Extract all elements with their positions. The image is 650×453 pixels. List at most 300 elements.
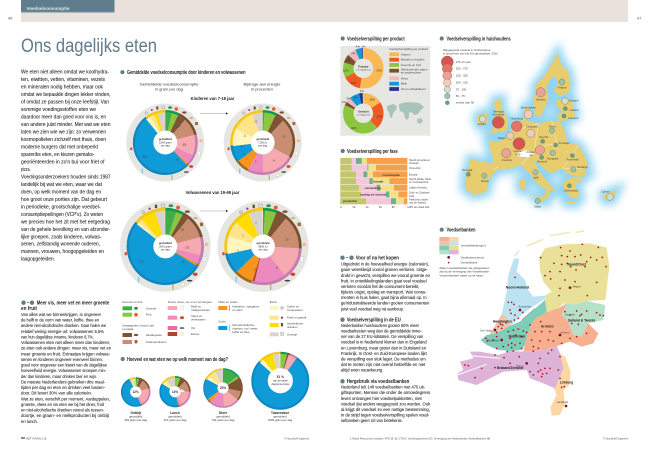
legend: EU map: 150 - 175: [456, 67, 468, 71]
legend: food groups: dranken: [287, 325, 298, 329]
body text: voedselverspilling in de EU: voedselresten weg dan de gemiddelde inwo-: [341, 328, 422, 334]
donut chart: children energy: 13: [254, 122, 258, 124]
legend: product: Vis en schaaldieren: [401, 87, 426, 91]
donut: diner: [204, 369, 242, 407]
body text: meer vis: ze eten ook andere dingen: meer vis, meer vet en: [21, 346, 111, 352]
body text: meer vis: Volwassenen eten niet alleen meer dan kinderen,: [21, 340, 110, 346]
map: Dutch food banks: Ridderkerk: [487, 339, 500, 342]
map: Dutch food banks: Haaglanden: [493, 319, 512, 323]
map: Dutch food banks: Amsterdam: [519, 305, 531, 308]
body text: voedselverspilling in de EU: [341, 323, 427, 374]
donut: gewicht: [342, 89, 383, 130]
legend: food groups: Extra: [270, 300, 277, 304]
donut: lunch: 14%: [172, 390, 178, 394]
stacked bar chart: phases: verwerking: [365, 186, 381, 190]
intro text: omdat we bepaalde dingen lekker vinden,: [21, 92, 110, 98]
legend: EU map: 125 - 150: [456, 74, 468, 78]
legend: food bank regions: zijn bij de Vereniging van Nederlandse: [439, 270, 489, 274]
map: food waste in EU households: Nederland: [511, 117, 523, 121]
stacked bar chart: phases: opslag en vervoer: [360, 192, 387, 196]
legend: EU map: [441, 48, 498, 105]
donut chart: adults grams: [120, 201, 211, 292]
body text: voedselverspilling in de EU: dat te meten zijn niet overal hetzelfde en niet: [341, 362, 426, 368]
body text: hergebruik: in de strijd tegen voedselverspilling spelen voed-: [341, 413, 430, 419]
legend: EU map: 75 - 100: [456, 87, 467, 91]
donut: tussendoor: dagconsumptie: [272, 382, 290, 386]
legend: product: Oliehoudende zaden: [401, 67, 428, 71]
map: food waste in EU households: Estland: [570, 98, 579, 102]
donut: energie: 14%: [350, 81, 357, 85]
body text: voedselverspilling in de EU: de verspilling een stuk lager. De methodes om: [341, 356, 426, 362]
subhead children: Kinderen van 7-18 jaar: [191, 96, 235, 101]
body text: voor of na het kopen: fruit. In ontwikkelingslanden gaat veel voedsel: [341, 278, 427, 284]
title: Ons dagelijks eten: [21, 36, 157, 57]
stacked bar chart: phases: productie: [343, 199, 357, 203]
labels: moments: gemiddeld: [216, 415, 230, 419]
map: Dutch food banks: [457, 231, 609, 416]
intro text: daardoor meer dan goed voor ons is, en: [21, 115, 106, 121]
column head right: [244, 82, 281, 92]
map: Dutch food banks: Salland & Twente: [568, 318, 595, 322]
map: food waste in EU households: Cyprus: [601, 190, 610, 194]
body text: hergebruik: selbanken geen rol van betekenis.: [341, 418, 403, 424]
legend: food groups: Groente: [146, 306, 157, 310]
map: food waste in EU households: Oosten-: [526, 150, 536, 154]
intro text: en mineralen nodig hebben, maar ook: [21, 85, 103, 91]
legend: food bank regions: Voedselbankregio's: [461, 244, 486, 248]
map: food waste in EU households: Bulgarije: [577, 165, 588, 169]
legend: product: Groente en fruit: [401, 63, 421, 67]
labels: moments: gemiddeld: [168, 415, 182, 419]
intro text: [21, 70, 111, 263]
intro text: in periodieke, grootschalige voedsel-: [21, 204, 101, 210]
legend: food groups: Niet-alcoholische: [232, 323, 255, 327]
map: food waste in EU households: Slovenië: [537, 159, 548, 163]
legend: food groups: Vis: [191, 326, 196, 330]
donut chart: children grams: 1184: [142, 156, 147, 158]
page number right: 97: [637, 16, 642, 20]
body text: voor of na het kopen: geïndustrialiseerde landen gooien consumenten: [341, 301, 430, 307]
map: Dutch food banks: Arnhem: [561, 331, 569, 334]
legend: EU map: minder dan 50: [456, 101, 475, 105]
map: food waste in EU households: Finland: [558, 85, 567, 89]
footer copyright left: © Noordhoff Uitgevers: [284, 436, 309, 440]
map: Dutch food banks: Rotterdam: [509, 335, 525, 339]
body text: hergebruik: leven ontvangen hier voedselpakketten, met: [341, 396, 422, 402]
legend: food bank regions: Alleen voedselbanken die aangesloten: [439, 266, 490, 270]
donut chart: adults grams: gemiddeld: [159, 241, 172, 245]
intro text: senen, zelfstandig wonende ouderen,: [21, 242, 100, 248]
header band: [21, 0, 628, 22]
donut chart: children energy: 25: [282, 136, 286, 138]
stacked bar chart: phases: van de Sahara: [409, 200, 426, 204]
map: Dutch food banks: Deventer: [565, 313, 575, 316]
stacked bar chart: phases: 80: [392, 205, 395, 209]
labels: moments: 304 gram per dag: [124, 418, 147, 422]
legend: product: Granen: [401, 52, 411, 56]
donut chart: children grams: per dag: [161, 144, 170, 148]
stacked bar chart: phases: handel: [373, 179, 383, 183]
legend: food bank regions: [439, 237, 490, 277]
stacked bar chart: phases: 40: [366, 205, 369, 209]
body text: meer vis: der dan kinderen, maar drinken bier en wijn.: [21, 374, 97, 380]
map: Dutch food banks: Brabant/Zeeland: [497, 366, 523, 370]
section heading: per fase: Voedselverspilling per fase: [347, 149, 398, 155]
intro text: van de gehele bevolking en van afzonder-: [21, 227, 111, 233]
map: food waste in EU households: Ierland: [478, 122, 486, 126]
stacked bar chart: phases: 0: [340, 205, 342, 209]
column head right: Bijdrage aan energie: [244, 82, 281, 87]
map: Dutch food banks: Den Haag: [480, 329, 492, 332]
column head right: in procenten: [251, 87, 273, 92]
legend: product: [389, 47, 428, 91]
donut: gewicht: 2%: [342, 100, 346, 104]
map: food waste in EU households: Spanje: [481, 179, 490, 183]
map: Dutch food banks: Landgraaf: [557, 401, 568, 404]
body text: meer vis: en niet-alcoholische dranken vooral als tussen-: [21, 408, 104, 414]
donut chart: adults energy: 6: [237, 250, 239, 252]
map: food waste in EU households: Letland: [570, 108, 579, 112]
body text: voor of na het kopen: drukt in gewicht, verspillen we vooral groente en: [341, 273, 430, 279]
intro text: mannen, vrouwen, hoogopgeleiden en: [21, 249, 104, 255]
donut: tussendoor: 51 %: [277, 375, 284, 379]
donut chart: adults grams: 273: [185, 247, 190, 249]
donut: energie: 53%: [376, 68, 383, 72]
map: food waste in EU households: Verenigd: [493, 109, 504, 113]
donut chart: children grams: gemiddeld: [159, 137, 172, 141]
section heading: per product: [341, 36, 405, 42]
legend: product: Voedselverspilling per product: [389, 47, 428, 51]
donut chart: adults energy: 8800 kJ: [258, 244, 268, 248]
section heading: huishoudens: [440, 36, 511, 42]
labels: moments: gemiddeld: [129, 415, 143, 419]
map: food waste in EU households: Griekenland: [564, 188, 578, 192]
map: food waste in EU households: Polen: [549, 124, 556, 128]
body text: voedselverspilling in de EU: Nederlandse huishoudens gooien 50% meer: [341, 323, 419, 329]
section heading: gemiddelde voedselconsumptie: Gemiddelde voedselconsumptie door kinderen en volwassenen: [127, 70, 246, 76]
intro text: consumptiepeilingen (VCP's). Zo weten: [21, 212, 103, 218]
donut: gewicht: 3%: [346, 96, 351, 100]
intro text: We eten niet alleen omdat we koolhydra-: [21, 70, 109, 76]
map: food waste in EU households: rijk: [529, 153, 533, 157]
body text: voor of na het kopen: [340, 262, 430, 312]
heading: hergebruik: Hergebruik via voedselbanken: [347, 379, 409, 385]
legend: food groups: Alcoholische: [287, 321, 304, 325]
legend: food groups: snoepwaren: [287, 308, 303, 312]
intro text: spareribs eten, en kiezen gemaks-: [21, 152, 95, 158]
legend: food groups: Fruit: [146, 313, 152, 317]
body text: voor of na het kopen: menten in huis halen, gaat bijna allemaal op. In: [341, 295, 427, 301]
donut: gewicht: 22%: [376, 114, 383, 118]
legend: food groups: Vlees en: [191, 314, 203, 318]
legend: food groups: vleeswaren: [191, 317, 206, 321]
donut: energie: 1%: [361, 44, 366, 48]
legend: EU map: 50 - 75: [456, 94, 465, 98]
map: food waste in EU households: Frankrijk: [502, 158, 512, 162]
map: food waste in EU households: [462, 53, 617, 208]
stacked bar chart: phases: Zuid- en Zuidoost-: [409, 191, 430, 195]
map: food waste in EU households: burg: [515, 152, 521, 156]
body text: meer vis: senen en kinderen ongeveer evenveel binnen,: [21, 357, 103, 363]
body text: voor of na het kopen: juist veel voedsel weg ná aankoop.: [340, 306, 404, 312]
legend: product: Vlees: [401, 76, 408, 80]
donut: ontbijt: 12%: [133, 390, 139, 394]
body text: meer vis: meer groente en fruit. Extraatjes krijgen volwas-: [21, 351, 110, 357]
legend: food groups: Eieren: [191, 332, 200, 336]
intro text: laagopgeleiden.: [21, 257, 55, 263]
intro text: ten, eiwitten, vetten, vitaminen, vezels: [21, 77, 105, 83]
donut: diner: 23%: [220, 386, 226, 390]
section heading: voedselbanken: [440, 228, 476, 234]
body text: meer vis: doortje, en graan- en melkproducten bij ontbijt: [21, 413, 110, 419]
labels: moments: Diner: [219, 411, 228, 415]
map: Dutch food banks: Noord/Oost: [568, 262, 587, 266]
donut: gewicht: Gewicht: [358, 109, 369, 113]
world map: [387, 102, 424, 124]
arrow children: [200, 112, 228, 115]
heading: voedselverspilling in de EU: Voedselverspilling in de EU: [347, 317, 401, 323]
subhead adults: Volwassenen van 19-69 jaar: [186, 190, 240, 195]
heading: meer vis: en fruit: [21, 306, 37, 312]
body text: meer vis: relatief weinig energie uit: volwassenen 5,5%: [21, 329, 105, 335]
donut: tussendoor: [252, 353, 308, 409]
donut chart: children grams: [126, 104, 204, 182]
legend: food groups: Melk en: [191, 305, 202, 309]
map: food waste in EU households: Litouwen: [568, 116, 579, 120]
donut: gewicht: 16%: [369, 97, 375, 101]
stacked bar chart: phases: Azië: [409, 194, 415, 198]
donut: energie: [343, 44, 383, 85]
stacked bar chart: phases: 100% van totaal, kkal: [407, 205, 430, 209]
legend: product: Melk: [401, 82, 407, 86]
arrow adults: [200, 210, 228, 212]
map: Dutch food banks: Meppel: [573, 286, 581, 289]
labels: moments: 413 gram per dag: [164, 418, 187, 422]
donut chart: adults grams: 1731: [139, 261, 145, 263]
map: food waste in EU households: Tsjechië: [539, 135, 549, 139]
donut chart: adults energy: per dag: [259, 248, 268, 252]
body text: voedselverspilling in de EU: Frankrijk. In Oost- en Zuid-Europese landen lijkt: [341, 351, 427, 357]
legend: food groups: Halvarine, margarine: [232, 305, 260, 309]
legend: food groups: Oliën en vetten: [218, 300, 238, 304]
intro text: landelijk bij wat we eten, waar we dat: [21, 182, 103, 188]
legend: food bank regions: Voedselbanken staan op de kaart.: [439, 273, 484, 277]
stacked bar chart: phases: Oceanië: [409, 161, 419, 165]
labels: moments: 1606 gram per dag: [268, 418, 293, 422]
donut chart: adults energy: 18: [276, 267, 279, 269]
labels: moments: Tussendoor: [271, 411, 290, 415]
intro text: Voedingsonderzoekers houden sinds 1987: [21, 174, 111, 180]
body text: voedselverspilling in de EU: ner van de 27 EU-lidstaten. De verspilling van: [341, 334, 424, 340]
body text: meer vis: [21, 312, 111, 425]
map: food waste in EU households: Luxem-: [513, 149, 522, 153]
body text: hergebruik: al krijgt dit voedsel zo een nuttige bestemming,: [341, 407, 430, 413]
legend: food groups: Koek en gebak: [287, 316, 307, 320]
intro text: moderne burgers dat met onbeperkt: [21, 144, 99, 150]
footer sources: 1 World Resources Institute / FAO [5, 6]; CTOA / Voedingscentrum [7]; Vereniging van Nederlandse Voedselbanken [8]: [350, 436, 490, 440]
body text: meer vis: andere niet-alcoholische dranken. Daar halen we: [21, 323, 106, 329]
heading: voor of na het kopen: [340, 255, 399, 261]
intro text: doen, op welk moment van de dag en: [21, 189, 101, 195]
donut chart: children energy: per dag: [258, 144, 268, 148]
map: Dutch food banks: Noord-Holland: [506, 285, 529, 289]
legend: food groups: melkproducten: [191, 308, 210, 312]
body text: hergebruik: [341, 385, 430, 424]
stacked bar chart: phases: consumptie: [382, 173, 400, 177]
donut: energie: 1,5 miljard kcal: [356, 69, 371, 72]
donut chart: children energy: 8: [244, 154, 246, 156]
legend: food groups: [122, 300, 307, 344]
legend: food groups: Aardappelen, brood, rijst: [122, 324, 154, 328]
legend: food groups: koffie en thee: [232, 330, 250, 334]
donut chart: adults grams: 188: [180, 229, 185, 231]
donut chart: adults energy: 5: [242, 235, 244, 237]
body text: meer vis: door. Dit levert 30% van alle calorieën.: [21, 391, 92, 397]
body text: voedselverspilling in de EU: altijd even nauwkeurig.: [341, 368, 383, 374]
legend: food groups: dranken: incl. water,: [232, 326, 258, 330]
donut: tussendoor: van de totale: [273, 379, 288, 383]
legend: EU map: Weggegooid voedsel in huishoudens,: [443, 48, 491, 52]
footer left: HET RIVM [1-3]: [26, 436, 47, 440]
body text: voedselverspilling in de EU: en Luxemburg, maar groter dan in Duitsland en: [341, 345, 426, 351]
page number left: 46: [8, 16, 13, 20]
section heading: moment van de dag: Hoeveel en wat eten we op welk moment van de dag?: [127, 357, 228, 363]
donut: ontbijt: [122, 378, 150, 406]
legend: food groups: en pasta: [122, 327, 134, 331]
legend: product: Wortels en knollen: [401, 58, 425, 62]
legend: food groups: Suiker en: [287, 305, 300, 309]
map: food waste in EU households: Roemenië: [567, 158, 579, 162]
donut chart: adults energy: [217, 201, 309, 292]
legend: food groups: Aardappelen: [146, 333, 162, 337]
stacked bar chart: phases: [340, 158, 432, 209]
map: Dutch food banks: Arnhem: [541, 324, 554, 328]
legend: food groups: en oliën: [232, 308, 243, 312]
stacked bar chart: phases: Latijns-Amerika: [409, 186, 427, 190]
legend: food bank regions: Distributiecentrum: [461, 255, 485, 259]
heading: meer vis: Meer vis, meer vet en meer groente: [37, 300, 109, 306]
body text: meer vis: goed voor ongeveer een kwart van de dagelijkse: [21, 363, 107, 369]
donut chart: children grams: 369: [182, 144, 187, 146]
donut chart: children grams: 184: [176, 126, 181, 128]
map: food waste in EU households: Slowakije: [558, 141, 570, 145]
map: Dutch food banks: Limburg: [560, 381, 573, 385]
donut: energie: Energie: [358, 64, 369, 68]
body text: voor of na het kopen: verloren voordat het de consument bereikt,: [341, 284, 419, 290]
body text: meer vis: Wat ze eten, verschilt per moment. Aardappelen,: [21, 396, 110, 402]
donut: energie: 7%: [351, 51, 356, 55]
legend: food groups: Graanproducten: [146, 340, 167, 344]
donut chart: children grams: 86: [176, 160, 179, 162]
donut: energie: 7%: [346, 58, 351, 62]
body text: voor of na het kopen: tijdens oogst, opslag en transport. Wat consu-: [341, 290, 427, 296]
body text: meer vis: Van alles wat we binnenkrijgen, is ongeveer: [21, 312, 101, 318]
map: food waste in EU households: België: [498, 136, 506, 140]
map: food waste in EU households: Portugal: [462, 168, 473, 172]
legend: EU map: in procenten van het EU-gemiddelde, 2010: [443, 52, 498, 56]
map: food waste in EU households: Malta: [534, 204, 541, 208]
legend: EU map: 175 of meer: [456, 60, 471, 64]
stacked bar chart: phases: en Centraal-Azië: [409, 180, 429, 184]
intro text: laten we zien wie we zijn: zo verwennen: [21, 130, 106, 136]
donut: gewicht: 2%: [360, 89, 364, 93]
intro text: georiënteerden in zo'n bui voor friet of: [21, 160, 105, 166]
stacked bar chart: phases: 60: [379, 205, 382, 209]
labels: moments: Ontbijt: [131, 411, 142, 415]
stacked bar chart: phases: Afrika ten zuiden: [409, 197, 429, 201]
column head left: [140, 82, 199, 92]
labels: moments: gemiddeld: [273, 415, 287, 419]
map: food waste in EU households: Denemarken: [521, 106, 536, 110]
donut: gewicht: 44%: [351, 126, 357, 130]
donut chart: children energy: 11: [244, 136, 247, 138]
column head left: Gemiddelde voedselconsumptie: [140, 82, 199, 87]
body text: hergebruik: giftepunten. Mensen die onder de armoedegrens: [341, 390, 430, 396]
intro text: lijke groepen, zoals kinderen, volwas-: [21, 234, 102, 240]
donut: energie: 4%: [356, 44, 360, 48]
legend: food groups: Zuivel, vlees, vis, ei en vervangers: [168, 300, 212, 304]
donut chart: children grams: 1594 gram: [159, 140, 172, 144]
donut: lunch: [160, 377, 190, 407]
section heading: per fase: [341, 149, 398, 155]
donut chart: children energy: [224, 104, 302, 182]
map: Dutch food banks: Tilburg: [516, 365, 524, 368]
section heading: huishoudens: Voedselverspilling in huishoudens: [446, 36, 511, 42]
legend: food groups: Overige: [287, 332, 298, 336]
donut chart: adults energy: 20: [286, 239, 289, 241]
body text: meer vis: en lunch.: [21, 419, 38, 425]
donut chart: children energy: gemiddeld: [256, 137, 270, 141]
body text: hergebruik: Nederland telt 148 voedselbanken met 475 uit-: [341, 385, 425, 391]
panel: waste per product: [340, 44, 430, 136]
stacked bar chart: phases: Noord-Afrika, West-: [409, 177, 432, 181]
body text: meer vis: de helft in de vorm van water, koffie, thee en: [21, 318, 99, 324]
column head left: in gram per dag: [155, 87, 183, 92]
intro text: pizza.: [21, 167, 30, 173]
intro text: van andere juist minder. Met wat we eten: [21, 122, 111, 128]
donut chart: adults energy: gemiddeld: [257, 241, 270, 245]
heading: meer vis: [21, 300, 109, 312]
body text: meer vis: groente, vlees en vis eten we bij het diner, fruit: [21, 402, 105, 408]
intro text: kosmopolieten zichzelf met thais, doen: [21, 137, 106, 143]
donut chart: adults grams: 2691 gram: [159, 244, 172, 248]
heading: voor of na het kopen: Voor of na het kopen: [356, 255, 399, 261]
legend: EU map: 100 - 125: [456, 81, 468, 85]
map: food waste in EU households: Zweden: [536, 97, 546, 101]
donut chart: children energy: 6: [241, 146, 243, 148]
section heading: per product: Voedselverspilling per product: [347, 36, 405, 42]
stacked bar chart: phases: Noord-Amerika en: [409, 158, 431, 162]
body text: meer vis: tijden per dag en eten en drinken veel tussen-: [21, 385, 105, 391]
donut: gewicht: 8%: [354, 95, 358, 99]
labels: moments: Lunch: [170, 411, 180, 415]
donut chart: children energy: 14: [272, 160, 276, 162]
body text: voor of na het kopen: Uitgedrukt in de hoeveelheid energie (calorieën),: [341, 262, 429, 268]
donut chart: adults energy: 10: [254, 269, 257, 271]
footer copyright right: © Noordhoff Uitgevers: [603, 436, 628, 440]
body text: hergebruik: voedsel dat anders weggegooid zou worden. Ook: [341, 401, 430, 407]
map: food waste in EU households: Koninkrijk: [493, 112, 505, 116]
donut chart: adults grams: per dag: [161, 248, 170, 252]
labels: moments: 732 gram per dag: [212, 418, 235, 422]
donut: energie: 12%: [343, 68, 349, 72]
body text: meer vis: van hun dagelijkse inname, kinderen 8,7%.: [21, 334, 94, 340]
legend: food groups: Vocht: [218, 319, 226, 323]
legend: food groups: Groente en fruit: [122, 300, 143, 304]
donut: gewicht: 1,3 miljard ton: [356, 114, 371, 117]
body text: voedselverspilling in de EU: voedsel is in Nederland kleiner dan in Engeland: [341, 340, 427, 346]
body text: meer vis: hoeveelheid energie. Volwassenen snoepen min-: [21, 368, 106, 374]
